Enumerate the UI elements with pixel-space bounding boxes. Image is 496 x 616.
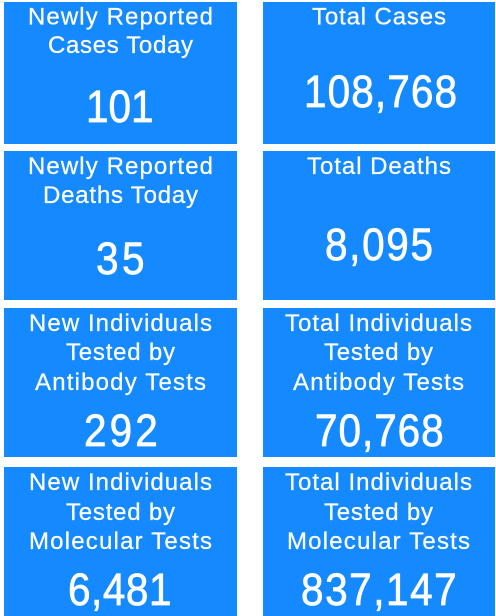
panel: total deaths bbox=[263, 151, 495, 300]
heading: total individuals tested by antibody tests: Total Individuals bbox=[285, 310, 472, 337]
panel: new individuals tested by antibody tests bbox=[4, 308, 237, 457]
heading: total individuals tested by antibody tests: Antibody Tests bbox=[293, 369, 464, 396]
heading: total individuals tested by molecular tests: Molecular Tests bbox=[287, 528, 470, 555]
heading: newly reported deaths today bbox=[28, 153, 213, 209]
heading: total individuals tested by molecular tests: Total Individuals bbox=[285, 469, 472, 496]
number: 108,768: 108,768 bbox=[304, 67, 457, 118]
panel: new individuals tested by molecular tests bbox=[4, 467, 237, 616]
heading: newly reported cases today bbox=[28, 4, 213, 59]
heading: new individuals tested by molecular tests: New Individuals bbox=[29, 469, 212, 496]
heading: total individuals tested by antibody tests: Tested by bbox=[324, 339, 433, 366]
heading: new individuals tested by molecular tests: Tested by bbox=[66, 499, 175, 526]
panel: total cases bbox=[263, 2, 495, 144]
number: 70,768: 70,768 bbox=[315, 406, 444, 457]
heading: new individuals tested by molecular tests: Molecular Tests bbox=[29, 528, 212, 555]
heading: new individuals tested by antibody tests: Antibody Tests bbox=[35, 369, 206, 396]
heading: total deaths: Total Deaths bbox=[307, 153, 451, 180]
panel: total individuals tested by antibody tests bbox=[263, 308, 495, 457]
heading: new individuals tested by antibody tests: Tested by bbox=[66, 339, 175, 366]
heading: total individuals tested by molecular tests: Tested by bbox=[324, 499, 433, 526]
heading: newly reported deaths today: Deaths Today bbox=[43, 182, 198, 209]
heading: newly reported cases today: Cases Today bbox=[48, 32, 193, 59]
number: 8,095: 8,095 bbox=[325, 220, 433, 271]
panel: newly reported deaths today bbox=[4, 151, 237, 300]
heading: new individuals tested by antibody tests bbox=[29, 310, 212, 396]
heading: new individuals tested by molecular tests bbox=[29, 469, 212, 555]
panel: total individuals tested by molecular tests bbox=[263, 467, 495, 616]
heading: new individuals tested by antibody tests: New Individuals bbox=[29, 310, 212, 337]
number: 6,481: 6,481 bbox=[68, 565, 172, 616]
heading: total individuals tested by antibody tests bbox=[285, 310, 472, 396]
heading: newly reported cases today: Newly Reported bbox=[28, 4, 213, 30]
number: 837,147: 837,147 bbox=[301, 565, 457, 616]
panel: newly reported cases today bbox=[4, 2, 237, 144]
heading: newly reported deaths today: Newly Reported bbox=[28, 153, 213, 180]
number: 35: 35 bbox=[96, 234, 145, 285]
number: 292: 292 bbox=[84, 406, 158, 457]
heading: total individuals tested by molecular tests bbox=[285, 469, 472, 555]
number: 101: 101 bbox=[86, 82, 154, 133]
heading: total cases: Total Cases bbox=[312, 4, 446, 30]
